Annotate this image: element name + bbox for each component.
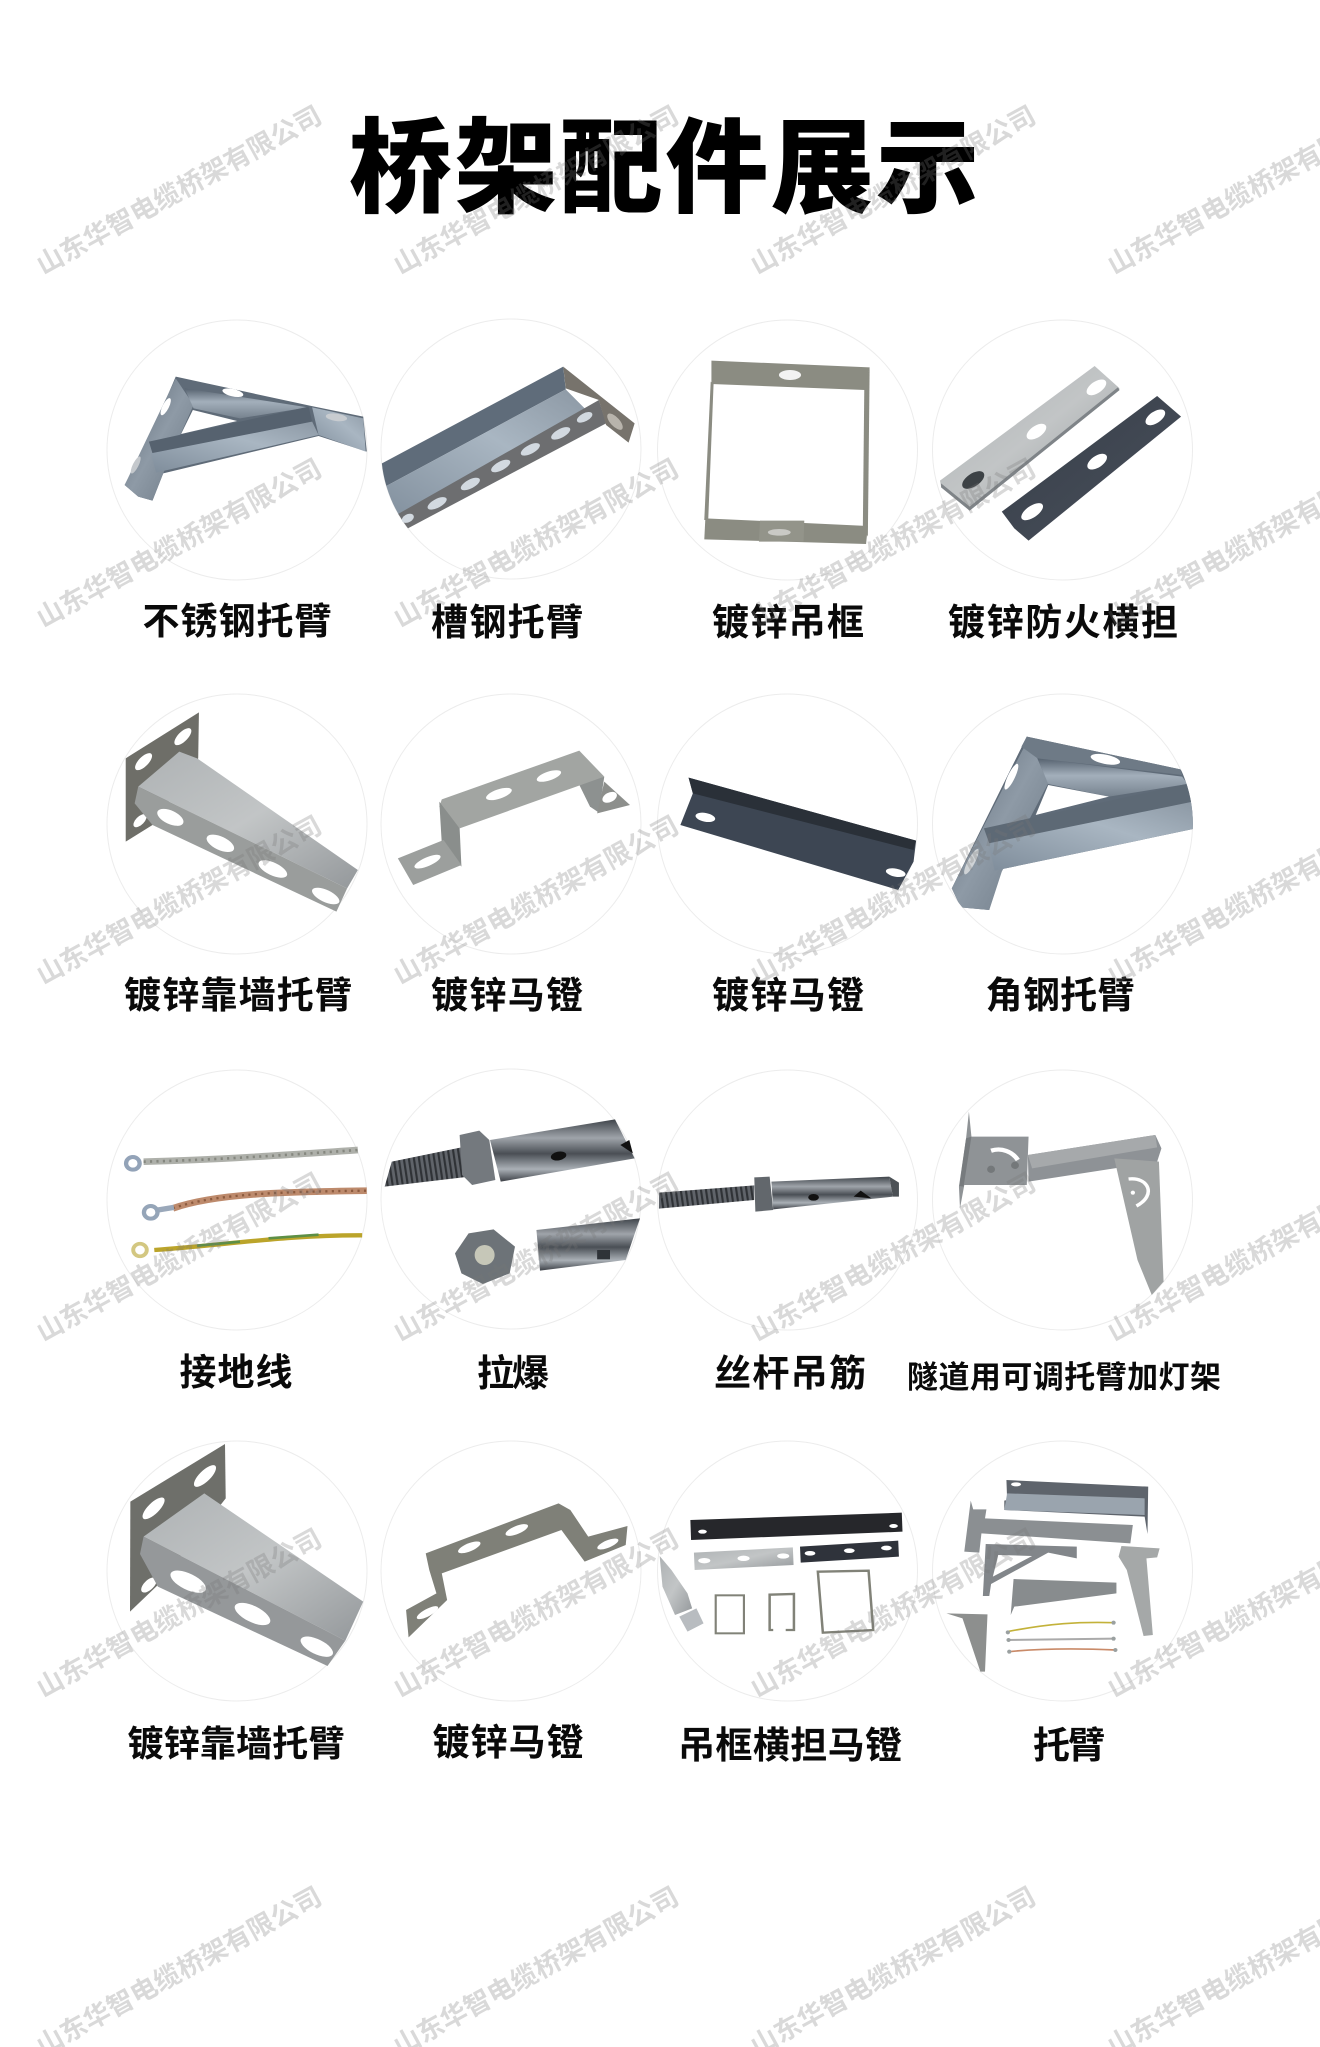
panel: 镀锌靠墙托臂 (row 4) [107,1441,367,1764]
panel: 镀锌马镫 [381,694,641,1016]
panel: 镀锌防火横担 [932,320,1192,643]
label: 镀锌防火横担 [948,602,1178,643]
panel: 丝杆吊筋 [658,1070,918,1394]
circle frame [107,1070,367,1330]
icon: thin hat stirrup [406,1503,627,1637]
label: 镀锌靠墙托臂 [128,1723,344,1764]
label: 镀锌马镫 [712,975,864,1016]
circle frame [658,694,918,954]
watermark grid: 山东华智电缆桥架有限公司 [388,100,684,280]
icon: threaded rod with anchor [659,1177,899,1212]
panel: 托臂 [932,1441,1192,1766]
circle frame [107,694,367,954]
watermark grid: 山东华智电缆桥架有限公司 [31,810,327,990]
watermark grid: 山东华智电缆桥架有限公司 [31,100,327,280]
icon: large wall bracket [130,1444,363,1666]
label: 托臂 [1033,1725,1105,1766]
icon: galvanized and fireproof cross arms [940,366,1181,541]
label: 槽钢托臂 [431,602,583,643]
panel: 镀锌马镫 (dark) [658,694,918,1016]
circle frame [932,320,1192,580]
watermark grid: 山东华智电缆桥架有限公司 [745,453,1041,633]
panel: 接地线 [107,1070,367,1393]
watermark grid: 山东华智电缆桥架有限公司 [388,453,684,633]
icon: galvanized hanger frame [704,361,870,544]
icon: wall bracket [126,712,358,912]
icon: angle steel bracket [952,737,1196,910]
watermark grid: 山东华智电缆桥架有限公司 [745,1167,1041,1347]
watermark grid: 山东华智电缆桥架有限公司 [388,810,684,990]
panel: 镀锌吊框 [658,320,918,643]
icon: channel steel bracket [376,367,635,528]
watermark grid: 山东华智电缆桥架有限公司 [31,1167,327,1347]
icon: hat-shaped stirrup [398,751,630,885]
circle frame [932,1070,1192,1330]
watermark grid: 山东华智电缆桥架有限公司 [388,1167,684,1347]
label: 隧道用可调托臂加灯架 [907,1360,1221,1395]
watermark grid: 山东华智电缆桥架有限公司 [31,1523,327,1703]
icon: adjustable tunnel bracket [959,1112,1164,1295]
circle frame [658,1070,918,1330]
circle frame [932,1441,1192,1701]
circle frame [381,1441,641,1701]
circle frame [107,320,367,580]
label: 不锈钢托臂 [142,601,332,642]
icon: expansion anchor [385,1119,640,1284]
circle frame [107,1441,367,1701]
watermark grid: 山东华智电缆桥架有限公司 [745,1523,1041,1703]
panel: 角钢托臂 [932,694,1196,1016]
panel: 镀锌靠墙托臂 [107,694,367,1016]
icon: bracket set [946,1480,1160,1672]
label: 镀锌马镫 [431,975,583,1016]
title: 桥架配件展示 [349,111,979,226]
label: 镀锌靠墙托臂 [124,975,352,1016]
circle frame [658,1441,918,1701]
label: 吊框横担马镫 [678,1725,902,1766]
icon: hanger frames, cross arms, stirrups set [660,1513,902,1633]
watermark grid: 山东华智电缆桥架有限公司 [388,1523,684,1703]
watermark grid: 山东华智电缆桥架有限公司 [745,100,1041,280]
icon: dark angle piece [680,778,916,890]
watermark grid: 山东华智电缆桥架有限公司 [31,453,327,633]
icon: stainless triangular bracket [125,377,367,501]
panel: 拉爆 [381,1069,641,1394]
icon: grounding wires [126,1150,367,1256]
label: 丝杆吊筋 [714,1353,866,1394]
watermark grid: 山东华智电缆桥架有限公司 [745,810,1041,990]
panel: 槽钢托臂 [376,319,641,643]
label: 接地线 [180,1352,292,1393]
label: 角钢托臂 [986,975,1134,1016]
panel: 不锈钢托臂 [107,320,367,642]
circle frame [381,319,641,579]
circle frame [658,320,918,580]
panel: 吊框横担马镫 [658,1441,918,1766]
label: 镀锌吊框 [712,602,864,643]
panel: 隧道用可调托臂加灯架 [907,1070,1221,1395]
circle frame [381,1069,641,1329]
panel: 镀锌马镫 (row 4) [381,1441,641,1763]
label: 镀锌马镫 [432,1722,584,1763]
circle frame [381,694,641,954]
label: 拉爆 [477,1353,549,1394]
circle frame [932,694,1192,954]
